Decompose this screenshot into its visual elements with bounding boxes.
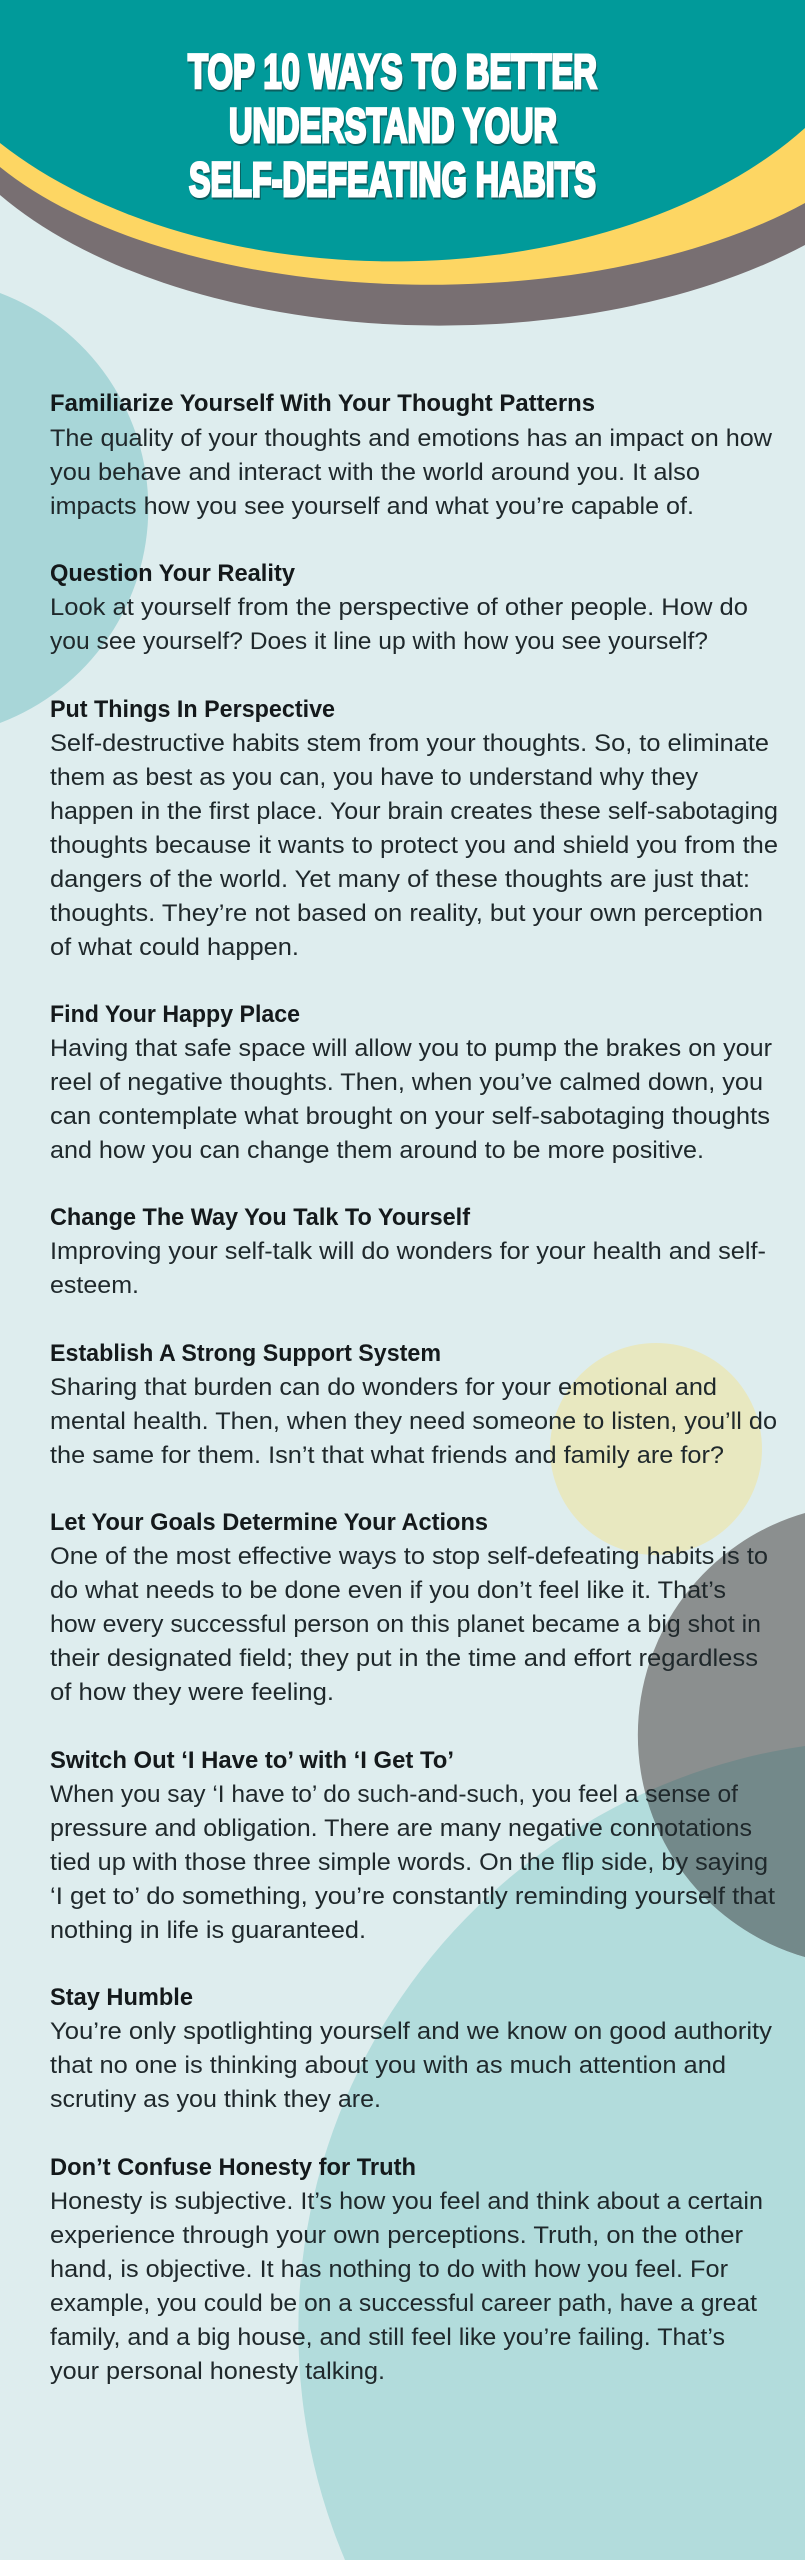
section 4: Find Your Happy Place: can contemplate what brought on your self-sabotaging thoughts [50,1103,770,1130]
section 1: Familiarize Yourself: you behave and interact with the world around you. It also [50,459,700,486]
section 9: Stay Humble: Stay Humble [50,1984,193,2011]
section 7: Let Your Goals Determine Your Actions [50,1509,768,1706]
section 9: Stay Humble: You’re only spotlighting yourself and we know on good authority [50,2018,772,2045]
section 5: Change The Way You Talk To Yourself [50,1204,766,1299]
section 10: Don't Confuse Honesty for Truth: hand, is objective. It has nothing to do with how you feel. For [50,2256,728,2283]
background circle: gray right [638,1513,805,1957]
section 4: Find Your Happy Place: Having that safe space will allow you to pump the brakes on your [50,1035,772,1062]
section 7: Let Your Goals Determine Your Actions: Let Your Goals Determine Your Actions [50,1509,488,1536]
section 2: Question Your Reality: Question Your Reality [50,560,296,587]
section 5: Change The Way You Talk To Yourself: Improving your self-talk will do wonders for your health and self- [50,1238,766,1265]
section 2: Question Your Reality: you see yourself? Does it line up with how you see yourself? [50,628,708,655]
section 10: Don't Confuse Honesty for Truth: experience through your own perceptions. Truth, on the other [50,2222,743,2249]
section 3: Put Things In Perspective: dangers of the world. Yet many of these thoughts are just that: [50,866,750,893]
section 3: Put Things In Perspective: thoughts. They’re not based on reality, but your own perception [50,900,763,927]
section 3: Put Things In Perspective: Self-destructive habits stem from your thoughts. So, to eliminate [50,730,769,757]
section 8: Switch Out I Have to with I Get To: tied up with those three simple words. On the flip side, by saying [50,1849,768,1876]
section 7: Let Your Goals Determine Your Actions: how every successful person on this planet became a big shot in [50,1611,761,1638]
section 1: Familiarize Yourself: impacts how you see yourself and what you’re capable of. [50,493,694,520]
header band: teal [0,0,805,261]
header band: gray [0,0,805,326]
section 4: Find Your Happy Place: reel of negative thoughts. Then, when you’ve calmed down, you [50,1069,763,1096]
section 7: Let Your Goals Determine Your Actions: do what needs to be done even if you don’t feel like it. That’s [50,1577,726,1604]
section 10: Don't Confuse Honesty for Truth: example, you could be on a successful career path, have a great [50,2290,757,2317]
title: SELF-DEFEATING HABITS [189,154,596,207]
section 8: Switch Out I Have to with I Get To: Switch Out ‘I Have to’ with ‘I Get To’ [50,1747,454,1774]
section 10: Don't Confuse Honesty for Truth: Don’t Confuse Honesty for Truth [50,2154,416,2181]
section 5: Change The Way You Talk To Yourself: esteem. [50,1272,139,1299]
section 7: Let Your Goals Determine Your Actions: of how they were feeling. [50,1679,334,1706]
section 9: Stay Humble: scrutiny as you think they are. [50,2086,381,2113]
section 3: Put Things In Perspective: thoughts because it wants to protect you and shield you from the [50,832,778,859]
section 8: Switch Out I Have to with I Get To: ‘I get to’ do something, you’re constantly reminding yourself that [50,1883,775,1910]
section 4: Find Your Happy Place: Find Your Happy Place [50,1001,300,1028]
section 8: Switch Out I Have to with I Get To: pressure and obligation. There are many negative connotations [50,1815,752,1842]
header band: yellow [0,0,805,285]
section 6: Establish A Strong Support System: Establish A Strong Support System [50,1340,441,1367]
section 8: Switch Out I Have to with I Get To [50,1747,775,1944]
title: UNDERSTAND YOUR [229,100,557,153]
section 8: Switch Out I Have to with I Get To: nothing in life is guaranteed. [50,1917,366,1944]
section 8: Switch Out I Have to with I Get To: When you say ‘I have to’ do such-and-such, you feel a sense of [50,1781,738,1808]
section 9: Stay Humble [50,1984,772,2113]
section 1: Familiarize Yourself: The quality of your thoughts and emotions has an impact on how [50,425,773,452]
section 6: Establish A Strong Support System: Sharing that burden can do wonders for your emotional and [50,1374,717,1401]
section 10: Don't Confuse Honesty for Truth [50,2154,763,2385]
background circle: large bottom right teal [298,1746,805,2560]
section 1: Familiarize Yourself: Familiarize Yourself With Your Thought Patterns [50,390,595,417]
section 6: Establish A Strong Support System [50,1340,777,1469]
section 2: Question Your Reality [50,560,748,655]
section 7: Let Your Goals Determine Your Actions: One of the most effective ways to stop self-defeating habits is to [50,1543,768,1570]
section 4: Find Your Happy Place [50,1001,772,1164]
section 5: Change The Way You Talk To Yourself: Change The Way You Talk To Yourself [50,1204,471,1231]
section 1: Familiarize Yourself [50,390,773,520]
section 10: Don't Confuse Honesty for Truth: your personal honesty talking. [50,2358,385,2385]
background circle: yellow [550,1343,762,1555]
section 3: Put Things In Perspective: them as best as you can, you have to understand why they [50,764,698,791]
section 4: Find Your Happy Place: and how you can change them around to be more positive. [50,1137,704,1164]
section 3: Put Things In Perspective: happen in the first place. Your brain creates these self-sabotaging [50,798,778,825]
section 9: Stay Humble: that no one is thinking about you with as much attention and [50,2052,726,2079]
title [188,46,597,207]
section 3: Put Things In Perspective [50,696,778,961]
background circle: left teal [0,293,148,723]
section 10: Don't Confuse Honesty for Truth: family, and a big house, and still feel like you’re failing. That’s [50,2324,725,2351]
title: TOP 10 WAYS TO BETTER [188,46,597,99]
background circle: gray and teal overlap [645,1746,805,1957]
section 3: Put Things In Perspective: of what could happen. [50,934,299,961]
section 7: Let Your Goals Determine Your Actions: their designated field; they put in the time and effort regardless [50,1645,758,1672]
section 6: Establish A Strong Support System: the same for them. Isn’t that what friends and family are for? [50,1442,724,1469]
section 2: Question Your Reality: Look at yourself from the perspective of other people. How do [50,594,748,621]
section 6: Establish A Strong Support System: mental health. Then, when they need someone to listen, you’ll do [50,1408,777,1435]
section 10: Don't Confuse Honesty for Truth: Honesty is subjective. It’s how you feel and think about a certain [50,2188,763,2215]
section 3: Put Things In Perspective: Put Things In Perspective [50,696,335,723]
header banner [0,0,805,326]
